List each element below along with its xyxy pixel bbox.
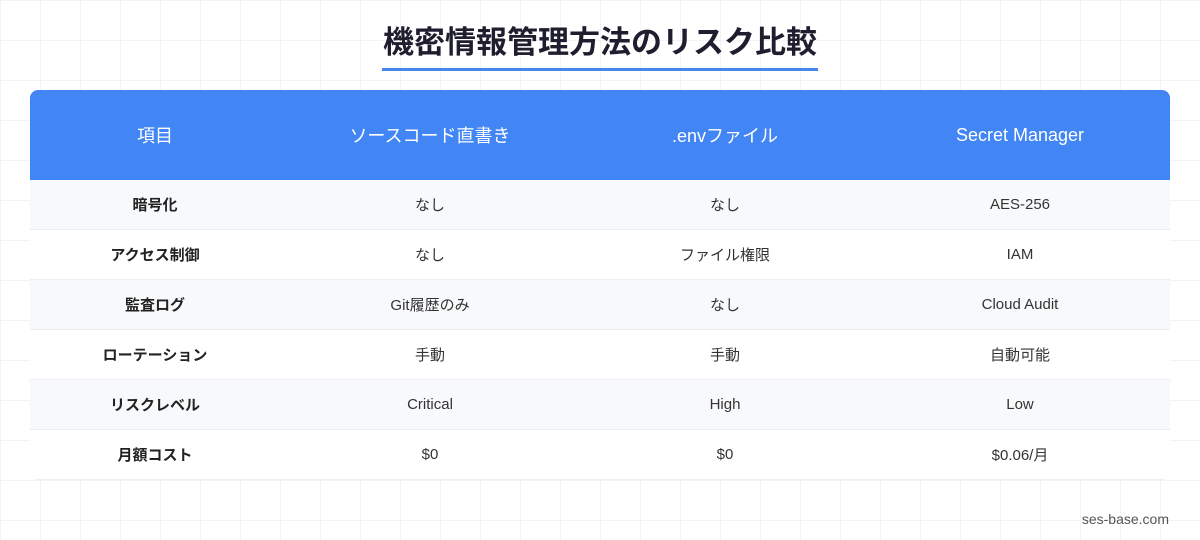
row: encryption xyxy=(30,180,1170,230)
row: access control: なし xyxy=(415,247,445,264)
row: audit log: Cloud Audit xyxy=(982,296,1058,313)
row: encryption: なし xyxy=(415,197,445,214)
row: audit log: 監査ログ xyxy=(125,297,185,314)
row: rotation: 手動 xyxy=(415,347,445,364)
row: risk level: High xyxy=(710,396,740,413)
row: monthly cost xyxy=(30,430,1170,480)
header row: Secret Manager xyxy=(956,124,1084,144)
footer credit: ses-base.com xyxy=(1082,511,1169,527)
header row: 項目 xyxy=(137,126,173,146)
row: audit log xyxy=(30,280,1170,330)
row: access control xyxy=(30,230,1170,280)
row: access control: IAM xyxy=(1007,246,1033,263)
header row: .envファイル xyxy=(672,126,778,146)
table xyxy=(30,90,1170,480)
title: 機密情報管理方法のリスク比較 xyxy=(383,25,817,60)
row: monthly cost: $0 xyxy=(717,446,733,463)
row: rotation: 自動可能 xyxy=(990,347,1050,364)
row: access control: ファイル権限 xyxy=(680,247,770,264)
row: audit log: なし xyxy=(710,297,740,314)
header row: ソースコード直書き xyxy=(349,126,511,146)
row: monthly cost: $0.06/月 xyxy=(992,447,1048,464)
row: risk level: Low xyxy=(1006,396,1034,413)
row: rotation: 手動 xyxy=(710,347,740,364)
row: rotation: ローテーション xyxy=(103,347,207,364)
row: audit log: Git履歴のみ xyxy=(390,297,470,314)
row: monthly cost: $0 xyxy=(422,446,438,463)
row: risk level: Critical xyxy=(407,396,453,413)
row: risk level xyxy=(30,380,1170,430)
row: encryption: 暗号化 xyxy=(132,197,178,214)
header row xyxy=(30,90,1170,180)
row: access control: アクセス制御 xyxy=(110,247,200,264)
row: rotation xyxy=(30,330,1170,380)
row: monthly cost: 月額コスト xyxy=(117,447,192,464)
row: risk level: リスクレベル xyxy=(110,397,200,414)
row: encryption: AES-256 xyxy=(990,196,1050,213)
row: encryption: なし xyxy=(710,197,740,214)
